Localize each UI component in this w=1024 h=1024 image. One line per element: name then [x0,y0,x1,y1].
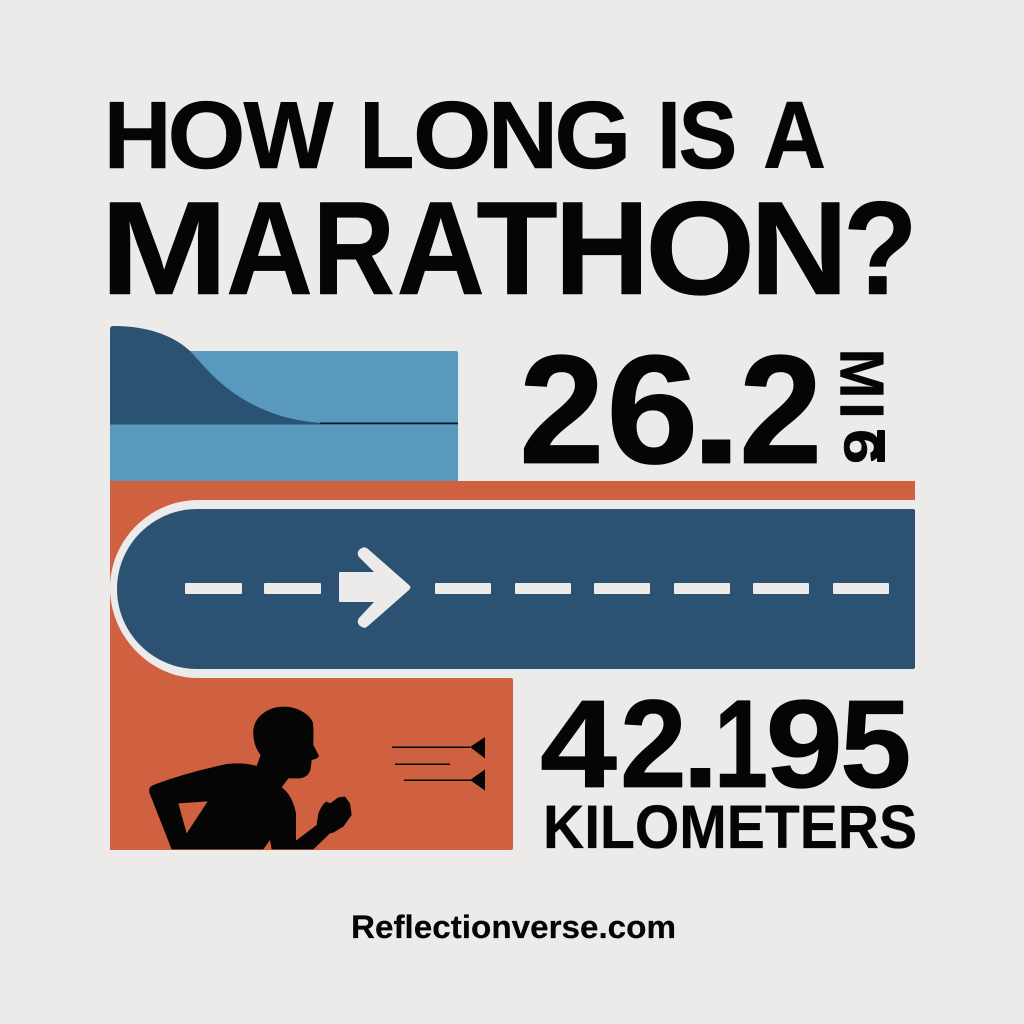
miles value: 2 [519,323,605,496]
title: G [554,82,631,189]
miles value: 6 [606,323,699,496]
title: O [413,82,492,189]
title: N [750,175,848,323]
footer: Reflectionverse.com [351,909,676,945]
title: O [168,82,246,189]
miles value [519,323,896,496]
icon: runner silhouette [149,707,352,849]
title: A [226,175,313,323]
title [100,82,918,323]
title: T [476,175,558,323]
title: A [763,82,826,189]
title: L [359,82,414,189]
panel: road [117,509,915,669]
kilometers value [540,675,917,861]
panel: terrain elevation block [110,326,458,483]
rotated miles unit: 9 [834,429,890,464]
miles value: . [690,323,743,496]
kilometers value: . [682,675,719,814]
icon: speed lines [392,737,485,790]
title: S [678,82,737,189]
title: H [104,82,172,189]
rotated miles unit: I [826,402,896,419]
title: H [554,175,650,323]
rotated miles unit: M [826,348,896,398]
title: A [396,175,485,323]
title: ? [843,175,918,323]
road dashes [185,583,889,594]
rotated miles unit [826,348,896,464]
kilometers value: 4 [540,675,617,814]
panel: orange backdrop [110,481,915,850]
kilometers value: 5 [840,675,912,814]
icon: road arrow [339,547,410,628]
title: I [657,82,681,189]
title: O [645,175,755,323]
miles value: 2 [739,323,822,496]
title: N [488,82,558,189]
kilometers value: 9 [765,675,843,814]
kilometers value: KILOMETERS [543,793,917,861]
kilometers value: 2 [620,675,687,814]
title: R [313,175,395,323]
title: W [244,82,334,189]
kilometers value: 1 [714,675,768,814]
title: M [100,175,228,323]
